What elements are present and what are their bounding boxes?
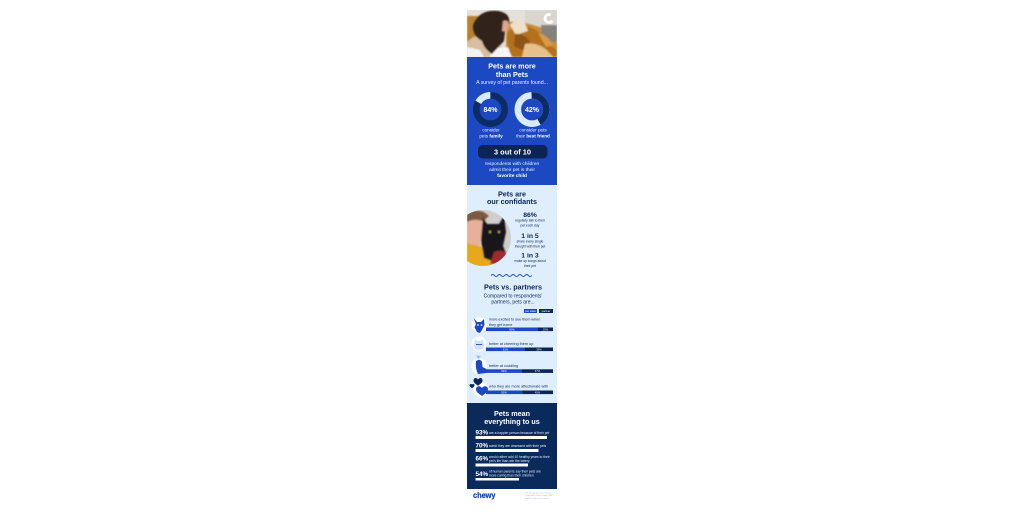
row: cheering them up: 39% [536,347,542,351]
heading: pets are more than pets: Pets are more [488,62,536,70]
row: cheering them up [472,336,553,352]
fine print: survey methodology: adult US dog and cat owners. [525,497,550,500]
row: more affectionate with [470,378,553,397]
subheading: compared to partners [484,294,542,306]
fine print: survey methodology [525,492,553,500]
row: better at cuddling: better at cuddling [489,364,518,368]
stat: 54% [476,469,541,480]
row: excited to see them: more excited to see them when [489,318,540,322]
fine print: survey methodology: The survey of pet parents was [525,492,553,494]
stat: 93%: 93% [476,430,489,436]
stat: 1 in 3: 1 in 3 [521,252,539,260]
row: more affectionate with: 45% [535,390,541,394]
row: more affectionate with: who they are more affectionate with [489,385,548,389]
stat: 1 in 5 [515,233,545,248]
donut chart: 42% best friend: 42% [525,107,540,114]
stat: 54%: more caring than their children [489,473,534,477]
stat: 1 in 3 [514,252,546,268]
stat: 66%: would rather add 10 healthy years to their [489,455,551,459]
icon: blue dog [472,317,487,333]
row: better at cuddling [471,356,553,374]
heading: pets mean everything to us [484,409,540,426]
stat: 70%: admit they are obsessed with their pets [489,444,547,448]
caption: family [479,128,503,138]
logo mark: white C badge [544,13,554,24]
stat: 54%: 54% [476,471,489,478]
stat: 1 in 5: share every single [517,240,544,244]
callout: 3 out of 10: 3 out of 10 [494,148,531,156]
stat: 70%: 70% [476,442,489,450]
heading: pets are our confidants: Pets are [498,190,526,198]
heading: pets mean everything to us: everything to us [484,417,540,426]
stat: 86% [515,212,546,228]
hero photo: woman with golden dog [467,10,557,57]
caption: family: consider [482,128,500,132]
icon: blue cat cuddling [471,356,487,374]
text: respondents with children: admit their pet is their [489,167,535,173]
heading: pets are our confidants: our confidants [487,197,537,206]
text: respondents with children [485,161,540,179]
heading: pets are more than pets [488,62,536,79]
text: respondents with children: favorite child [497,173,527,179]
caption: best friend: their best friend [516,134,550,138]
logo: chewy: chewy [473,491,496,500]
photo: woman with black cat [467,210,511,266]
heading: pets mean everything to us: Pets mean [494,409,530,418]
stat: 93% [476,430,549,439]
subheading: compared to partners: partners, pets are... [491,300,535,306]
panel: pets mean everything [467,403,557,489]
stat: 1 in 3: make up songs about [514,259,546,263]
fine print: survey methodology: conducted by Chewy among 1,000 [525,494,553,497]
row: excited to see them: 20% [543,327,549,331]
legend: partner [542,309,550,313]
caption: family: pets family [479,134,503,138]
row: excited to see them: they get home [489,323,512,327]
icon: white cat [472,336,486,352]
stat: 1 in 5: thought with their pet [515,244,545,248]
icon: hearts [470,378,488,397]
stat: 66%: pet's life than win the lottery [489,459,530,463]
heading: pets are more than pets: than Pets [496,70,528,79]
row: better at cuddling: 53% [501,369,507,373]
stat: 1 in 5: 1 in 5 [521,233,539,240]
heading: pets vs. partners: Pets vs. partners [484,282,542,292]
panel: pets are more than pets [467,57,557,185]
heading: pets are our confidants [487,190,537,206]
stat: 86%: 86% [523,212,537,219]
row: cheering them up: better at cheering them up [489,342,533,346]
stat: 70% [476,442,547,452]
subheading: compared to partners: Compared to respondents' [484,294,542,300]
legend [524,309,553,313]
text: respondents with children: respondents with children [485,161,540,167]
subheading: A survey of pet parents found... [476,80,548,86]
stat: 1 in 3: their pet [524,264,536,268]
row: cheering them up: 61% [503,347,509,351]
stat: 66%: 66% [476,456,489,462]
stat: 93%: are a happier person because of their pet [489,431,549,435]
donut chart: 84% family: 84% [483,107,498,114]
legend: pet stats [525,309,536,313]
row: excited to see them: 80% [509,327,515,331]
stat: 86%: regularly talk to their [515,218,546,222]
row: more affectionate with: 55% [501,390,507,394]
caption: best friend [516,128,550,138]
panel: confidants and partners [467,185,557,403]
stat: 66% [476,455,551,466]
row: better at cuddling: 47% [535,369,541,373]
row: excited to see them [472,317,553,333]
stat: 86%: pet each day [521,224,540,228]
stat: 54%: of human parents say their pets are [489,469,541,473]
caption: best friend: consider pets [519,128,547,132]
